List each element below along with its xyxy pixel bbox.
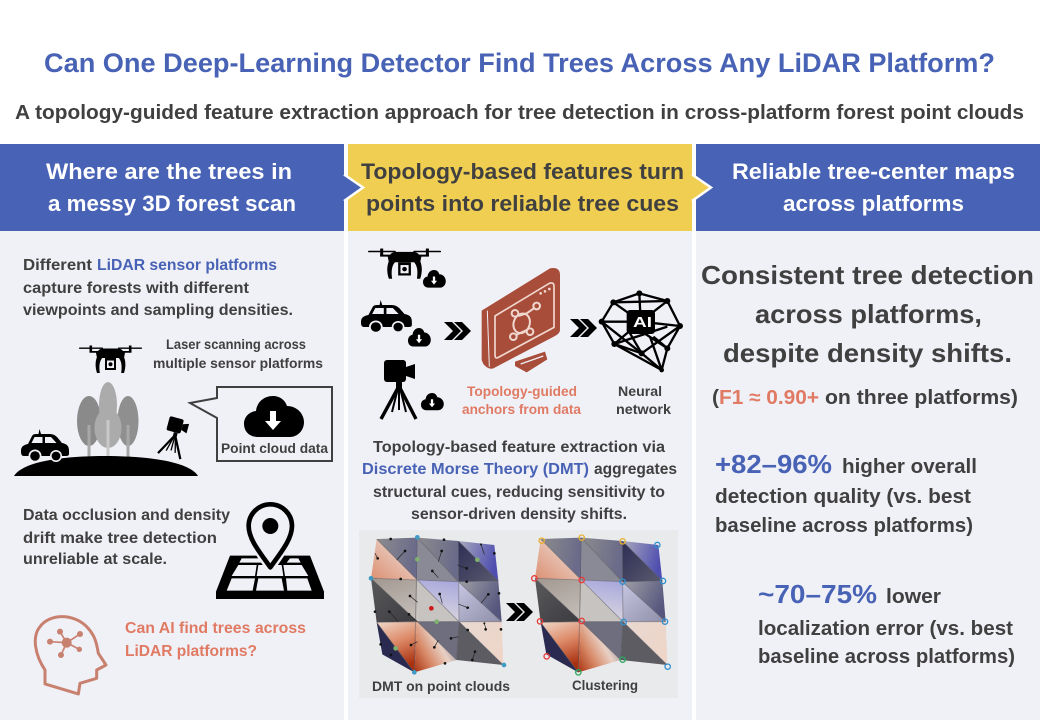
arrow: to topology — [444, 322, 471, 340]
text: DMT explanation: structural cues, reducing sensitivity to — [373, 484, 665, 501]
stat: detection quality: higher overall — [842, 456, 977, 478]
text: F1 score: F1 ≈ 0.90+ — [719, 387, 819, 409]
text: main result: Consistent tree detection — [701, 260, 1034, 290]
text: question: LiDAR platforms? — [125, 643, 257, 660]
stat: detection quality: detection quality (vs. best — [715, 486, 971, 508]
icon: map pin — [216, 500, 324, 599]
text: occlusion and density drift: drift make tree detection — [23, 530, 217, 547]
text: LiDAR intro: Different — [23, 257, 93, 274]
caption: DMT on point clouds: DMT on point clouds — [372, 678, 510, 694]
stat: localization error: localization error (vs. best — [758, 618, 1013, 640]
icon: hill — [14, 456, 198, 476]
text: question — [125, 620, 306, 660]
text: DMT explanation: sensor-driven density shifts. — [411, 506, 627, 523]
icon: AI head — [35, 617, 106, 694]
caption: neural network: network — [616, 401, 671, 417]
header: method — [344, 144, 708, 231]
text: LiDAR intro — [23, 257, 293, 319]
stat: localization error — [758, 579, 1015, 668]
header: results: across platforms — [783, 191, 964, 216]
caption: clustering: Clustering — [572, 677, 638, 693]
callout: point cloud data — [190, 387, 332, 461]
icon: monitor — [482, 268, 560, 372]
header: method: points into reliable tree cues — [366, 191, 679, 216]
stat: detection quality: baseline across platforms) — [715, 515, 973, 537]
caption: laser scanning: multiple sensor platforms — [153, 356, 323, 371]
icon: drone with cloud — [368, 249, 446, 288]
header: problem: Where are the trees in — [46, 159, 292, 184]
title: Can One Deep-Learning Detector Find Trees Across Any LiDAR Platform? — [44, 48, 995, 78]
stat: localization error: lower — [886, 586, 941, 608]
stat: detection quality — [715, 449, 977, 537]
text: main result: across platforms, — [755, 299, 982, 329]
text: occlusion and density drift: Data occlusion and density — [23, 507, 230, 524]
stat: detection quality: +82–96% — [715, 449, 832, 479]
icon: car with cloud — [361, 300, 431, 346]
text: main result: despite density shifts. — [723, 338, 1012, 368]
header: results: Reliable tree-center maps — [732, 159, 1015, 184]
caption: neural network: Neural — [618, 383, 662, 399]
text: question: Can AI find trees across — [125, 620, 306, 637]
icon: drone — [79, 346, 142, 373]
text: DMT explanation: aggregates — [594, 461, 677, 478]
icon: camera with cloud — [381, 360, 444, 419]
arrow: to clustering — [506, 603, 533, 621]
label: AI: AI — [633, 314, 652, 331]
caption: topology-guided anchors: Topology-guided — [467, 383, 577, 399]
header: results — [692, 144, 1040, 231]
panel: results — [692, 144, 1040, 720]
callout: point cloud data: Point cloud data — [221, 441, 328, 456]
arrow: to neural network — [570, 319, 597, 337]
chart: clustering mesh — [532, 535, 670, 675]
text: LiDAR intro: viewpoints and sampling densities. — [23, 302, 293, 319]
text: F1 score: on three platforms) — [825, 387, 1018, 409]
header: method: Topology-based features turn — [361, 159, 684, 184]
text: occlusion and density drift — [23, 507, 230, 568]
panel: DMT figure — [359, 530, 678, 698]
header: problem: a messy 3D forest scan — [48, 191, 296, 216]
text: LiDAR intro: LiDAR sensor platforms — [97, 257, 277, 274]
stat: localization error: ~70–75% — [758, 579, 877, 609]
panel: problem — [0, 144, 360, 720]
illustration: forest scan — [14, 346, 198, 476]
caption: topology-guided anchors: anchors from data — [462, 401, 581, 417]
text: DMT explanation: Discrete Morse Theory (DMT) — [362, 461, 589, 478]
stat: localization error: baseline across platforms) — [758, 646, 1015, 668]
panel: method — [344, 144, 708, 720]
text: F1 score — [712, 387, 1018, 409]
header: problem — [0, 144, 360, 231]
icon: car — [21, 429, 69, 462]
icon: tripod scanner — [158, 415, 190, 459]
caption: laser scanning: Laser scanning across — [166, 337, 306, 352]
text: DMT explanation: Topology-based feature extraction via — [373, 439, 665, 456]
text: F1 score: ( — [712, 387, 719, 409]
text: occlusion and density drift: unreliable at scale. — [23, 551, 167, 568]
chart: DMT mesh — [369, 535, 506, 675]
caption: topology-guided anchors — [462, 383, 581, 417]
subtitle: A topology-guided feature extraction approach for tree detection in cross-platform forest point clouds — [15, 102, 1024, 124]
caption: laser scanning — [153, 337, 323, 371]
text: main result — [701, 260, 1034, 368]
icon: trees — [77, 382, 138, 457]
icon: neural network — [599, 290, 683, 372]
text: LiDAR intro: capture forests with different — [23, 280, 250, 297]
caption: neural network — [616, 383, 671, 417]
text: DMT explanation — [362, 439, 677, 523]
